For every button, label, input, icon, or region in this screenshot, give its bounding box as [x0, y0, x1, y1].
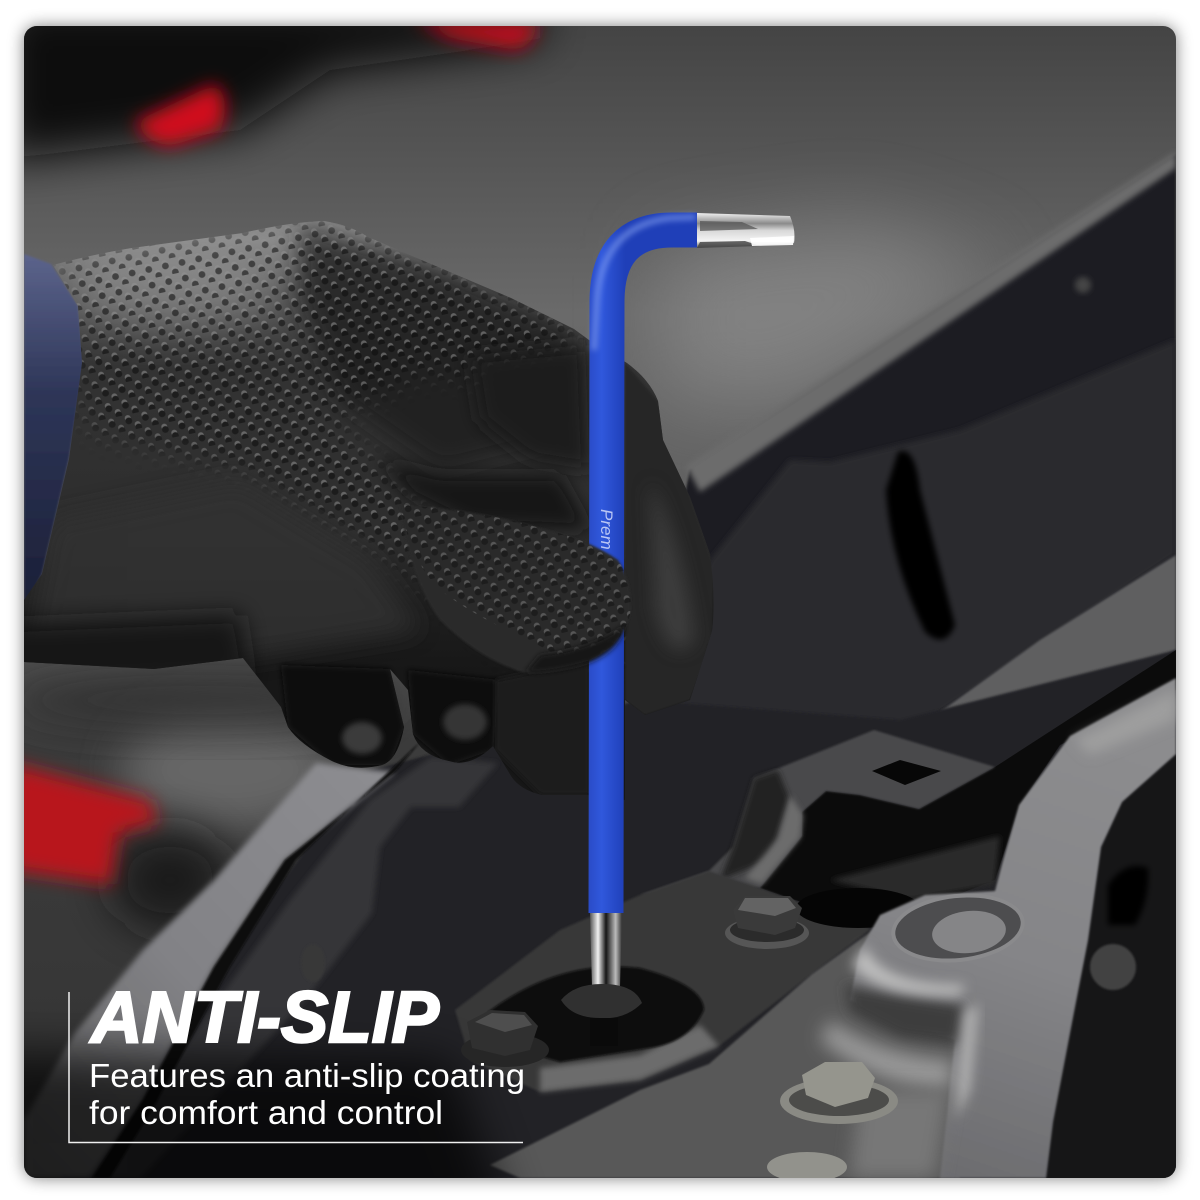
- chrome driver shaft: [590, 913, 622, 987]
- anti-slip blue hex key: [590, 213, 794, 987]
- bolt: left dark: [461, 1010, 549, 1067]
- description: for comfort and control: [89, 1094, 443, 1131]
- black gap: [760, 650, 1176, 925]
- silver arm: [820, 678, 1176, 1178]
- under-bracket surface: [830, 836, 1000, 900]
- hood black seam: [92, 742, 420, 1178]
- raised panel: [176, 756, 496, 1076]
- rivet: [301, 944, 325, 982]
- thumb over tool: [400, 505, 631, 673]
- glove texture and shading: [26, 221, 712, 767]
- red blurred handles: [10, 20, 536, 885]
- fender panel: [680, 154, 1176, 720]
- sleeve: [24, 254, 84, 610]
- tool shaft: [606, 230, 697, 913]
- bolt: lower right: [780, 1062, 898, 1124]
- gloved hand: [0, 215, 724, 815]
- bolt: bottom: [767, 1152, 847, 1178]
- mid bracket plate: [455, 871, 871, 1092]
- lower plate: [490, 925, 960, 1178]
- bend highlight: [594, 217, 696, 350]
- screw head: [561, 984, 642, 1046]
- light strip: [943, 554, 1176, 710]
- callout bracket: [69, 992, 523, 1142]
- right dark cavity: [1046, 754, 1176, 1178]
- bolt: centre: [725, 896, 809, 949]
- plate hole: [488, 966, 704, 1062]
- side nub: [1090, 944, 1136, 990]
- hub rivet: [895, 894, 1021, 962]
- brand mark on tool: Prem: [597, 509, 616, 550]
- lower structure base: [198, 649, 1176, 1178]
- bottom-left dark vignette: [0, 1050, 520, 1200]
- description: Features an anti-slip coating: [89, 1057, 525, 1094]
- glove base: [24, 221, 714, 800]
- torx tip: [697, 213, 794, 248]
- heading: ANTI-SLIP: [89, 978, 440, 1058]
- oval hole: [796, 888, 920, 928]
- description: [89, 1057, 525, 1131]
- hood edge: [24, 763, 395, 1178]
- callout: [69, 978, 525, 1142]
- upper bracket: [640, 730, 995, 895]
